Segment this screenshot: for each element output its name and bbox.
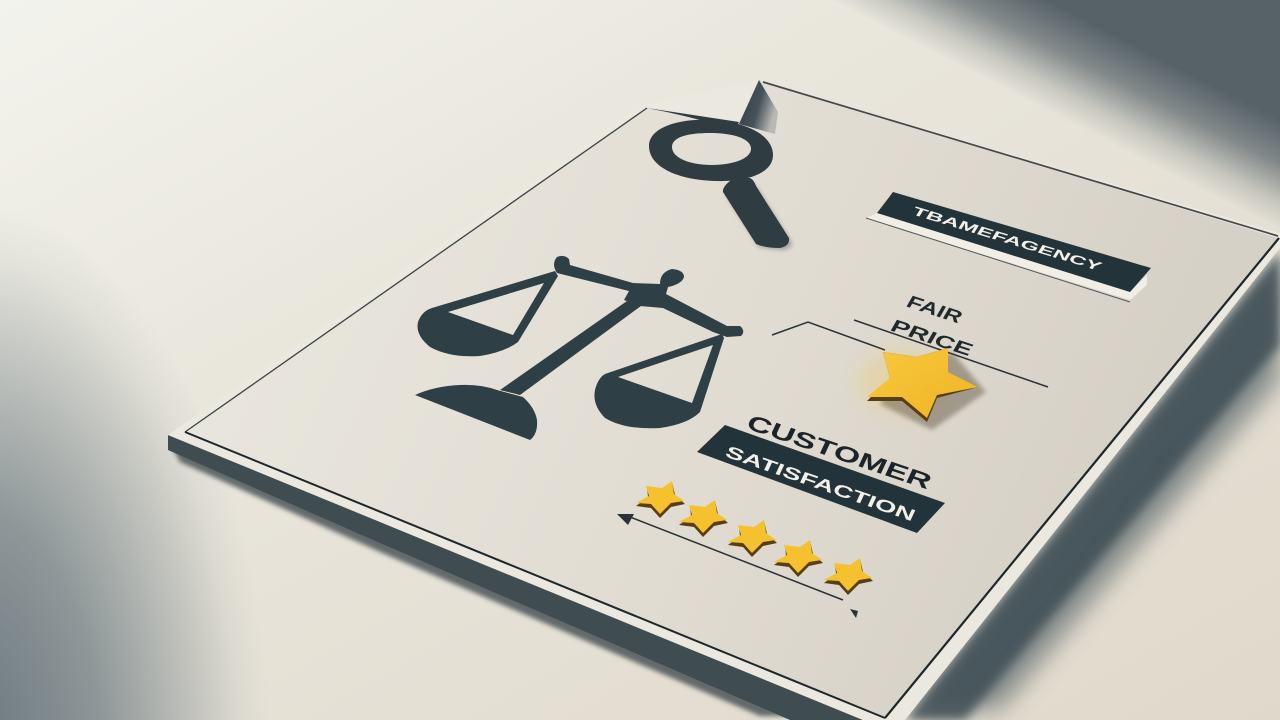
right pan xyxy=(594,334,724,428)
star 3 xyxy=(728,520,777,557)
paper shadow xyxy=(172,252,1280,720)
label: customer satisfaction xyxy=(697,410,945,533)
label: fair price xyxy=(772,292,1048,387)
star 1 xyxy=(636,481,685,518)
star 2 xyxy=(679,500,728,537)
label: customer satisfaction: SATISFACTION xyxy=(722,442,918,525)
paper sheet xyxy=(168,80,1280,720)
star 4 xyxy=(774,540,823,577)
left pan xyxy=(418,271,558,356)
folded corner xyxy=(647,80,778,134)
label: fair price: PRICE xyxy=(887,316,977,360)
label: fair price: FAIR xyxy=(903,292,966,327)
beam xyxy=(554,256,743,337)
label: transparency: TBAMEFAGENCY xyxy=(909,204,1105,274)
rating arrow xyxy=(617,514,858,618)
label: customer satisfaction: CUSTOMER xyxy=(743,410,936,494)
label: transparency xyxy=(866,192,1151,302)
five star rating xyxy=(636,481,873,595)
star 5 xyxy=(824,558,873,595)
icon: balance scales xyxy=(415,256,743,440)
base xyxy=(415,385,537,440)
pillar xyxy=(500,301,641,395)
icon: magnifying glass xyxy=(649,120,792,250)
icon: large gold star xyxy=(857,348,986,430)
